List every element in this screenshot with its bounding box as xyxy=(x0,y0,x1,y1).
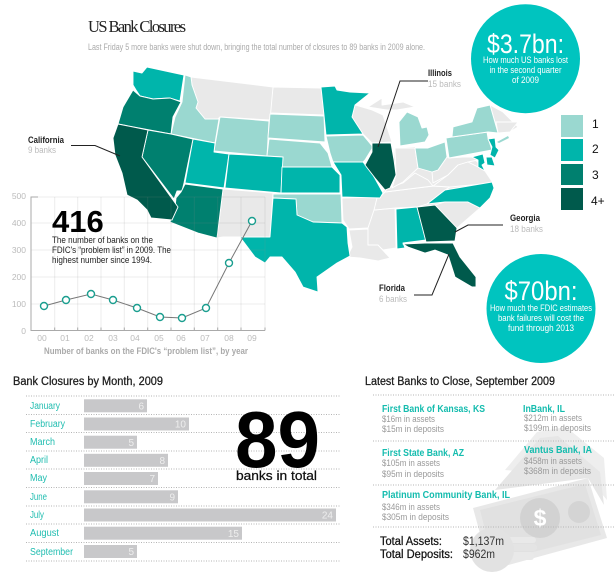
bar chart: closures by month xyxy=(26,396,341,561)
label: Georgia: 18 banks xyxy=(510,224,543,234)
line chart: problem list: 02 xyxy=(84,333,94,343)
bank: First Bank of Kansas: $15m in deposits xyxy=(382,424,444,434)
label: Illinois: 15 banks xyxy=(428,79,461,89)
label: Florida: 6 banks xyxy=(379,294,407,304)
label: California xyxy=(28,135,120,156)
callout: $70bn xyxy=(486,254,596,363)
heading: monthly closures: Bank Closures by Month, 2009 xyxy=(13,376,163,388)
line chart: problem list: 03 xyxy=(108,333,118,343)
bank: Vantus Bank: $458m in assets xyxy=(524,456,582,466)
bank: First State Bank xyxy=(382,448,464,479)
bank: First Bank of Kansas: First Bank of Kansas, KS xyxy=(382,404,485,415)
callout: 416: 416 xyxy=(52,204,104,239)
label: Georgia xyxy=(455,213,543,234)
map legend: 2 xyxy=(592,142,599,156)
totals: Total Assets: xyxy=(380,536,442,548)
bank: Vantus Bank: Vantus Bank, IA xyxy=(524,445,592,456)
label: Illinois: Illinois xyxy=(428,68,452,78)
line chart: problem list: 0 xyxy=(21,326,26,336)
bar chart: closures by month: February xyxy=(30,419,65,430)
line chart: problem list: 07 xyxy=(200,333,210,343)
bank: First State Bank: $95m in deposits xyxy=(382,469,444,479)
line chart: problem list: 300 xyxy=(12,245,26,255)
subtitle: Last Friday 5 more banks were shut down, bringing the total number of closures to 89 banks in 2009 alone. xyxy=(88,42,425,52)
bar chart: closures by month: March xyxy=(30,437,55,448)
bar chart: closures by month: 7 xyxy=(149,474,155,485)
list dividers xyxy=(373,395,615,527)
total: 89 banks: 89 xyxy=(235,395,320,484)
bar chart: closures by month: 9 xyxy=(169,492,175,504)
bank: InBank xyxy=(523,404,591,433)
line chart: problem list: 04 xyxy=(130,333,140,343)
bar chart: closures by month: 15 xyxy=(228,529,239,540)
bar chart: closures by month: 8 xyxy=(159,456,165,467)
line chart: problem list: 01 xyxy=(60,333,70,343)
bar chart: closures by month: 5 xyxy=(128,547,134,558)
bar chart: closures by month: September xyxy=(30,547,74,558)
line chart: problem list xyxy=(12,191,265,356)
bank: InBank: $199m in deposits xyxy=(524,423,591,433)
bar chart: closures by month: August xyxy=(30,528,59,539)
map legend: 1 xyxy=(592,117,599,131)
map legend xyxy=(561,115,605,210)
total: 89 banks: banks in total xyxy=(236,469,317,483)
callout: $70bn: $70bn: xyxy=(504,276,578,306)
title: US Bank Closures xyxy=(88,17,186,36)
map legend: 4+ xyxy=(591,194,605,208)
bank: Platinum Community Bank xyxy=(382,490,510,522)
label: Georgia: Georgia xyxy=(510,213,541,223)
bar chart: closures by month: June xyxy=(30,492,47,503)
callout: 416: highest number since 1994. xyxy=(52,255,152,266)
label: California: 9 banks xyxy=(28,145,56,155)
callout: $3.7bn: in the second quarter xyxy=(490,65,562,75)
bank: Platinum Community Bank: $305m in deposits xyxy=(382,512,449,522)
bank: Platinum Community Bank: Platinum Community Bank, IL xyxy=(382,490,510,501)
line chart: problem list: Number of banks on the FDIC's “problem list”, by year xyxy=(44,346,248,356)
US map xyxy=(113,67,518,292)
bank: Vantus Bank: $368m in deposits xyxy=(524,466,591,476)
line chart: problem list: 100 xyxy=(12,299,26,309)
totals xyxy=(380,536,504,561)
line chart: problem list: 400 xyxy=(12,218,26,228)
bank: First State Bank: $105m in assets xyxy=(382,458,440,468)
bank: First State Bank: First State Bank, AZ xyxy=(382,448,464,459)
bar chart: closures by month: 6 xyxy=(138,402,144,412)
totals: $1,137m xyxy=(463,536,504,548)
label: California: California xyxy=(28,135,65,145)
label: Illinois xyxy=(378,68,461,147)
callout: $3.7bn: of 2009 xyxy=(512,75,539,85)
line chart: problem list: 00 xyxy=(37,333,47,343)
bar chart: closures by month: January xyxy=(30,401,60,412)
label: Florida: Florida xyxy=(379,283,406,293)
bar chart: closures by month: July xyxy=(30,510,44,521)
line chart: problem list: 05 xyxy=(154,333,164,343)
bank: InBank: InBank, IL xyxy=(523,404,565,415)
line chart: problem list: 06 xyxy=(176,333,186,343)
bank: Vantus Bank xyxy=(524,445,592,476)
line chart: problem list: 500 xyxy=(12,191,26,201)
bar chart: closures by month: 5 xyxy=(128,438,134,449)
bar chart: closures by month: May xyxy=(30,473,47,484)
icon: money: $ xyxy=(534,505,547,531)
bank: InBank: $212m in assets xyxy=(524,413,582,423)
callout: $70bn: bank failures will cost the xyxy=(498,313,584,323)
heading: latest banks: Latest Banks to Close, September 2009 xyxy=(365,376,555,388)
icon: money xyxy=(470,427,607,572)
totals: $962m xyxy=(463,549,495,561)
bar chart: closures by month: 10 xyxy=(175,420,186,430)
bank: First Bank of Kansas xyxy=(382,404,485,434)
callout: 416: FDIC's “problem list” in 2009. The xyxy=(52,245,171,256)
line chart: problem list: 08 xyxy=(224,333,234,343)
callout: $70bn: fund through 2013 xyxy=(508,323,574,333)
callout: 416: The number of banks on the xyxy=(52,235,153,246)
callout: $3.7bn xyxy=(471,4,580,113)
line chart: problem list: 09 xyxy=(247,333,257,343)
line chart: problem list: 200 xyxy=(12,272,26,282)
bar chart: closures by month: 24 xyxy=(322,510,333,522)
totals: Total Deposits: xyxy=(380,549,453,561)
bank: First Bank of Kansas: $16m in assets xyxy=(382,414,435,424)
label: Florida xyxy=(379,254,449,304)
callout: 416 xyxy=(52,204,171,266)
callout: $70bn: How much the FDIC estimates xyxy=(490,303,592,313)
callout: $3.7bn: How much US banks lost xyxy=(483,55,568,65)
callout: $3.7bn: $3.7bn: xyxy=(487,29,564,59)
map legend: 3 xyxy=(592,168,599,182)
bank: Platinum Community Bank: $346m in assets xyxy=(382,502,440,512)
bar chart: closures by month: April xyxy=(30,455,48,466)
